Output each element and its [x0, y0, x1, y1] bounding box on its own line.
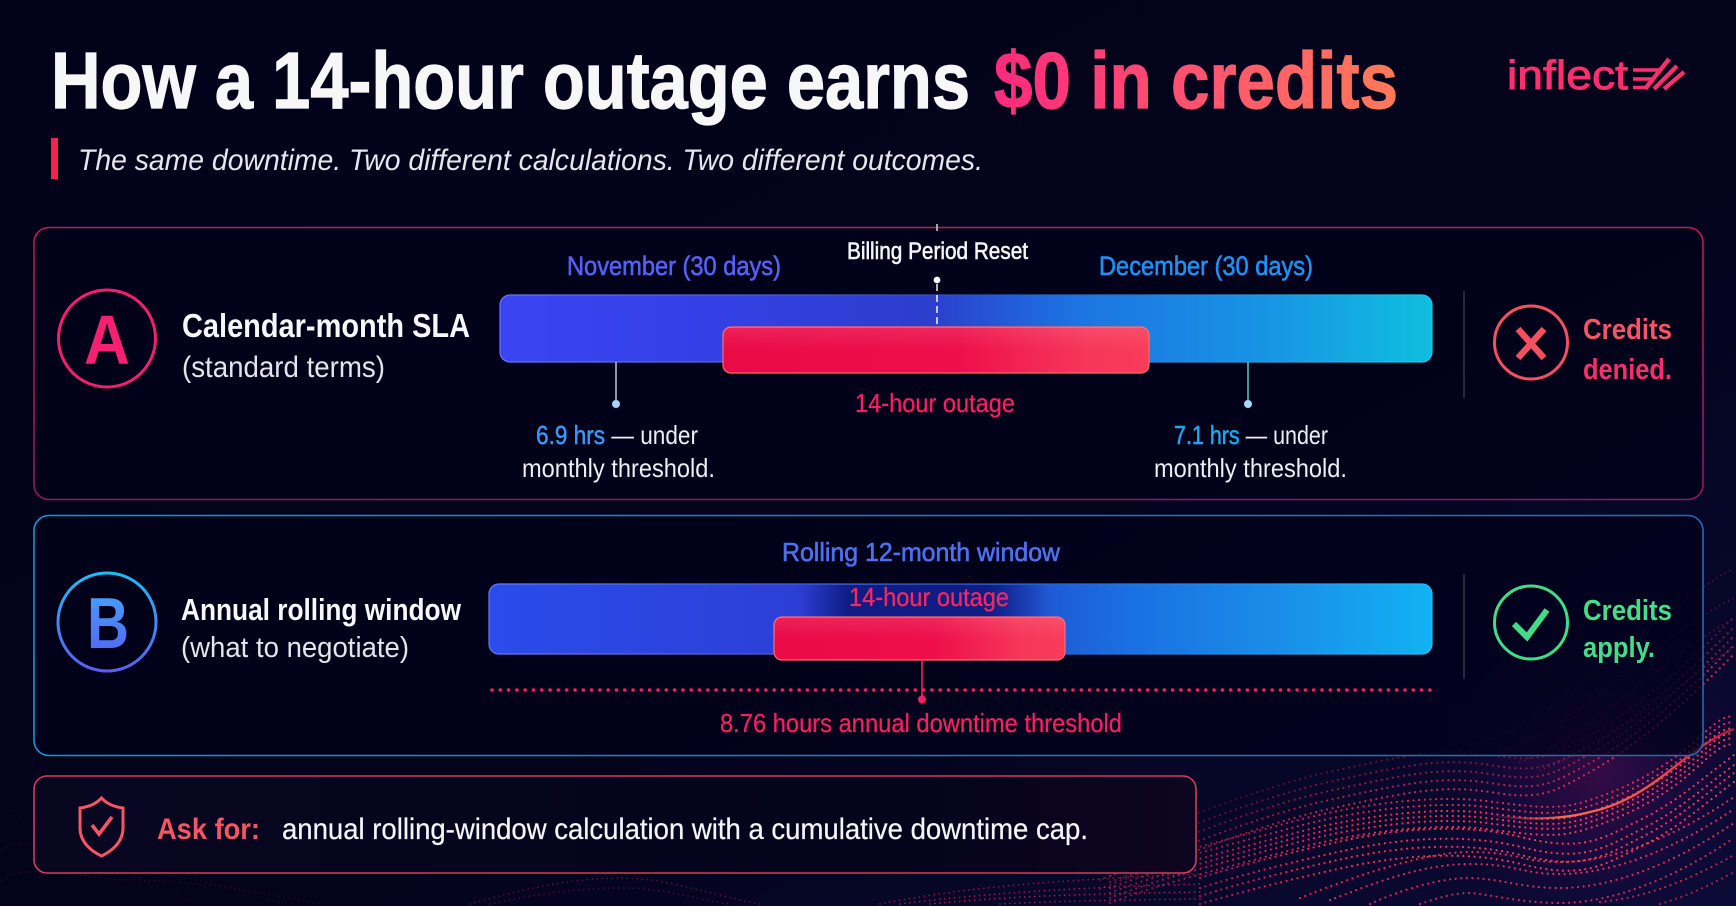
scenario B label: (what to negotiate) — [181, 632, 409, 664]
outcome B: credits apply: apply. — [1583, 632, 1655, 664]
icon: denied cross — [1494, 306, 1568, 379]
threshold leader — [918, 660, 926, 704]
scenario B label — [181, 592, 462, 664]
subtitle with accent bar: The same downtime. Two different calculations. Two different outcomes. — [78, 144, 983, 177]
outcome A: credits denied — [1583, 314, 1672, 386]
ask for label: Ask for: — [157, 813, 260, 846]
outage bar — [723, 327, 1149, 373]
outcome B: credits apply — [1583, 595, 1672, 664]
callout frame — [34, 776, 1196, 873]
icon: approved check — [1494, 586, 1568, 659]
title: $0 in credits — [994, 36, 1398, 125]
outage label on bar: 14-hour outage — [849, 582, 1009, 612]
outcome B: credits apply: Credits — [1583, 595, 1672, 627]
December note: 7.1 hrs — under — [1174, 420, 1328, 450]
panel A: calendar-month SLA — [34, 224, 1703, 500]
billing reset marker — [934, 224, 940, 327]
November leader — [612, 362, 620, 408]
panel A frame — [34, 228, 1703, 500]
November note: monthly threshold. — [522, 453, 715, 483]
icon: shield check — [80, 798, 123, 856]
December note — [1154, 420, 1347, 483]
scenario A label — [182, 307, 470, 384]
scenario B label: Annual rolling window — [181, 592, 462, 627]
rolling window bar — [489, 584, 1432, 654]
badge B: B — [87, 584, 129, 664]
logo: inflect — [1507, 52, 1684, 98]
outage bar — [774, 617, 1065, 660]
outage label: 14-hour outage — [855, 388, 1015, 418]
logo: inflect: inflect — [1507, 52, 1629, 98]
outcome A: credits denied: Credits — [1583, 314, 1672, 346]
callout: ask for — [34, 776, 1196, 873]
rolling window label: Rolling 12-month window — [782, 537, 1060, 567]
December leader — [1244, 362, 1252, 408]
outcome A: credits denied: denied. — [1583, 354, 1672, 386]
ask for text: annual rolling-window calculation with a cumulative downtime cap. — [282, 813, 1088, 846]
December label: December (30 days) — [1099, 251, 1313, 281]
November note: 6.9 hrs — under — [536, 420, 698, 450]
badge B — [58, 573, 156, 671]
threshold label: 8.76 hours annual downtime threshold — [720, 708, 1122, 738]
dotted annual threshold line — [492, 688, 1438, 692]
billing period reset label: Billing Period Reset — [847, 238, 1028, 265]
November label: November (30 days) — [567, 251, 781, 281]
scenario A label: (standard terms) — [182, 351, 385, 384]
panel B frame — [34, 516, 1703, 756]
title: How a 14-hour outage earns — [51, 36, 970, 125]
November note — [522, 420, 715, 483]
two-month timeline bar — [500, 295, 1432, 362]
badge A — [58, 290, 156, 387]
badge A: A — [84, 301, 130, 379]
panel B: annual rolling window — [34, 516, 1703, 756]
scenario A label: Calendar-month SLA — [182, 307, 470, 344]
December note: monthly threshold. — [1154, 453, 1347, 483]
